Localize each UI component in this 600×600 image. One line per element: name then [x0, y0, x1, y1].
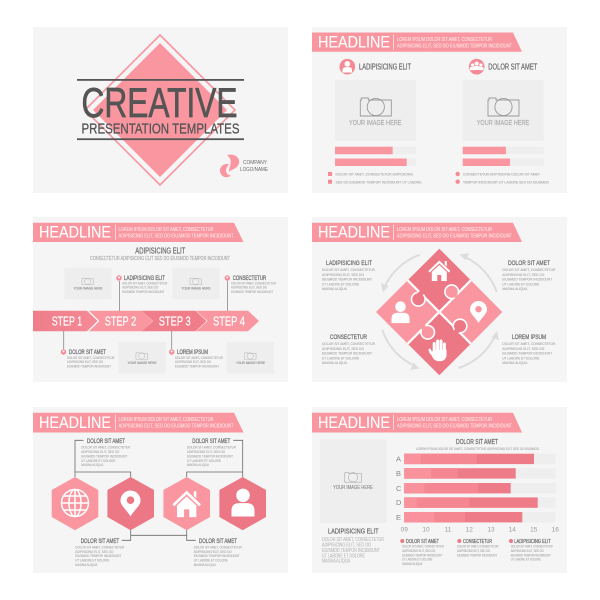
text block: dolor sit amet: UT LABORE ET DOLORE	[502, 281, 540, 286]
text block: lorem ipsum	[502, 334, 555, 365]
progress bars left	[335, 147, 416, 166]
text block: bottom left: DOLOR SIT AMET	[81, 539, 119, 545]
text block: ladipisicing	[322, 528, 384, 564]
text block: consectetur: MAGNA ALIQUA	[322, 360, 347, 365]
text block: consectetur: EIUSMOD TEMPOR INCIDIDUNT	[322, 351, 373, 356]
text block: top right: ADIPISICING ELIT, SED DO	[187, 449, 225, 454]
headline ribbon: ADIPISICING ELIT, SED DO EIUSMOD TEMPOR INCIDIDUNT	[397, 234, 513, 240]
title rule top	[77, 79, 244, 81]
legend: consectetur: CONSECTETUR	[463, 539, 492, 545]
text block: top right: UT LABORE ET DOLORE	[187, 458, 221, 463]
icon: house	[428, 260, 450, 281]
image placeholder 1: YOUR IMAGE HERE	[74, 286, 103, 290]
subtitle: PRESENTATION TEMPLATES	[82, 120, 240, 137]
text block: ladipisicing: ADIPISICING ELIT, SED DO	[322, 272, 364, 277]
logo text: LOGO/NAME	[240, 167, 268, 173]
panel: bar chart slide	[312, 407, 567, 573]
text block: bottom right: EIUSMOD TEMPOR INCIDIDUNT	[194, 553, 240, 558]
bar row A	[404, 454, 556, 464]
headline ribbon: HEADLINE	[318, 32, 390, 52]
logo text	[240, 160, 268, 173]
chart subtitle: LOREM IPSUM DOLOR SIT AMET, CONSECTETUR ADIPISICING ELIT SED DO EIUSMOD	[416, 446, 539, 451]
text block: lorem ipsum: DOLOR SIT AMET, CONSECTETUR	[502, 341, 555, 346]
text block: ladipisicing: UT LABORE ET DOLORE	[322, 281, 359, 286]
text block: lorem ipsum: UT LABORE ET DOLORE	[502, 355, 540, 360]
text block: top left: ADIPISICING ELIT, SED DO	[81, 449, 119, 454]
icon: pin	[120, 490, 141, 516]
legend: dolor sit amet: EIUSMOD TEMPOR INCIDIDUNT	[402, 552, 443, 557]
text block: consectetur: CONSECTETUR	[330, 334, 367, 341]
legend: dolor sit amet: UT LABORE ET DOLORE	[402, 557, 433, 562]
icon: hand	[430, 341, 446, 360]
legend: ladipisicing	[509, 539, 553, 562]
panel: steps timeline	[33, 217, 288, 382]
headline ribbon: LOREM IPSUM DOLOR SIT AMET, CONSECTETUR	[397, 417, 492, 423]
text block: bottom right: ADIPISICING ELIT, SED DO	[194, 549, 232, 554]
hexagon: globe	[52, 477, 98, 530]
callout: lorem ipsum: EIUSMOD TEMPOR INCIDIDUNT	[175, 364, 219, 368]
text block: lorem ipsum: MAGNA ALIQUA	[502, 360, 528, 365]
headline ribbon: LOREM IPSUM DOLOR SIT AMET, CONSECTETUR	[397, 37, 492, 43]
section title: ADIPISICING ELIT	[135, 246, 185, 256]
legend: ladipisicing: LADIPISICING ELIT	[514, 539, 551, 545]
panel: two image columns	[312, 27, 567, 193]
icon: person	[392, 301, 410, 323]
legend: dolor sit amet: ADIPISICING ELIT, SED DO	[402, 548, 435, 553]
text block: ladipisicing: LADIPISICING ELIT	[326, 260, 372, 267]
puzzle pieces	[376, 249, 502, 375]
text block: ladipisicing: DOLOR SIT AMET, CONSECTETUR	[322, 537, 384, 543]
axis labels: 13	[487, 526, 495, 533]
text block: lorem ipsum: ADIPISICING ELIT, SED DO	[502, 346, 544, 351]
axis labels: 09	[401, 526, 408, 533]
section subtitle: CONSECTETUR ADIPISICING ELIT SED DO EIUSMOD TEMPOR INCIDIDUNT	[90, 256, 230, 262]
bar row E	[404, 512, 556, 522]
headline ribbon	[312, 413, 522, 432]
legend: consectetur: DOLOR SIT AMET, CONSECTETUR	[457, 544, 499, 549]
text block: dolor sit amet: DOLOR SIT AMET	[508, 260, 550, 267]
arrow: top left	[381, 255, 420, 292]
callout: consectetur: CONSECTETUR	[233, 276, 267, 282]
text block: ladipisicing: MAGNA ALIQUA	[322, 558, 350, 564]
headline ribbon: HEADLINE	[39, 413, 111, 432]
legend right: TEMPOR INCIDIDUNT UT LABORE SED DO EIUSMOD	[463, 179, 549, 184]
category labels	[396, 454, 402, 522]
hexagon: person	[219, 477, 266, 530]
text block: dolor sit amet: EIUSMOD TEMPOR INCIDIDUNT	[502, 277, 553, 282]
callout: consectetur: ADIPISICING ELIT, SED DO	[231, 285, 267, 290]
callout: dolor sit amet: EIUSMOD TEMPOR INCIDIDUNT	[67, 364, 111, 368]
callout: dolor sit amet	[61, 331, 115, 368]
text block: bottom left	[75, 539, 124, 567]
callout: ladipisicing: EIUSMOD TEMPOR INCIDIDUNT	[122, 289, 165, 294]
legend left: DOLOR SIT AMET, CONSECTETUR ADIPISICING	[336, 172, 413, 176]
text block: top right	[187, 439, 236, 467]
image placeholder left	[335, 80, 416, 141]
image placeholder 1	[64, 268, 112, 299]
callout: ladipisicing: LADIPISICING ELIT	[124, 276, 165, 282]
hexagon: pin	[107, 477, 154, 530]
text block: top left: UT LABORE ET DOLORE	[81, 458, 116, 463]
callout: lorem ipsum: LOREM IPSUM	[177, 350, 208, 356]
text block: ladipisicing: UT LABORE ET DOLORE	[322, 553, 365, 559]
panel: puzzle diagram	[312, 217, 567, 382]
image placeholder 3: YOUR IMAGE HERE	[128, 360, 157, 365]
text block: ladipisicing: EIUSMOD TEMPOR INCIDIDUNT	[322, 548, 380, 554]
icon: person badge	[340, 59, 355, 74]
title rule bottom	[77, 138, 244, 140]
callout: ladipisicing	[116, 275, 167, 311]
text block: bottom right: MAGNA ALIQUA	[194, 562, 216, 567]
callout: ladipisicing: ADIPISICING ELIT, SED DO	[122, 285, 158, 290]
text block: bottom right: DOLOR SIT AMET, CONSECTETUR	[194, 544, 242, 549]
image placeholder right	[463, 80, 544, 141]
text block: ladipisicing: DOLOR SIT AMET, CONSECTETUR	[322, 267, 375, 272]
callout: lorem ipsum: ADIPISICING ELIT, SED DO	[175, 359, 211, 364]
arrow: top right	[460, 253, 497, 292]
headline ribbon: LOREM IPSUM DOLOR SIT AMET, CONSECTETUR	[397, 227, 492, 233]
icon: house	[172, 491, 201, 517]
text block: top left: EIUSMOD TEMPOR INCIDIDUNT	[81, 453, 128, 458]
text block: ladipisicing	[322, 260, 375, 291]
axis labels: 16	[552, 526, 559, 533]
column heading right: DOLOR SIT AMET	[488, 62, 537, 72]
headline ribbon	[312, 32, 522, 52]
legend: consectetur: ADIPISICING ELIT, SED DO	[457, 548, 490, 553]
image placeholder right: YOUR IMAGE HERE	[477, 118, 529, 127]
text block: bottom right: DOLOR SIT AMET	[199, 539, 237, 545]
category labels: C	[396, 484, 402, 493]
callout: consectetur: DOLOR SIT AMET, CONSECTETUR	[231, 280, 276, 286]
step 1 arrow: STEP 1	[52, 315, 82, 329]
legend: consectetur: EIUSMOD TEMPOR INCIDIDUNT	[457, 552, 497, 557]
headline ribbon: HEADLINE	[318, 223, 390, 242]
legend: ladipisicing: ADIPISICING ELIT, SED DO	[511, 548, 544, 553]
step 3 arrow	[142, 311, 206, 331]
text block: ladipisicing: EIUSMOD TEMPOR INCIDIDUNT	[322, 277, 373, 282]
icon: person	[232, 489, 254, 517]
arrow: bottom right	[458, 331, 499, 368]
image placeholder 4	[227, 342, 274, 374]
text block: top left: DOLOR SIT AMET	[87, 439, 125, 445]
diamond fill	[93, 43, 227, 177]
headline ribbon	[312, 223, 522, 242]
legend: dolor sit amet	[400, 539, 444, 566]
image placeholder 4: YOUR IMAGE HERE	[236, 360, 265, 365]
text block: top right: EIUSMOD TEMPOR INCIDIDUNT	[187, 453, 233, 458]
text block: top left: MAGNA ALIQUA	[81, 462, 104, 467]
image placeholder 2: YOUR IMAGE HERE	[182, 286, 211, 290]
connector lines	[75, 440, 243, 540]
diamond outline	[85, 35, 235, 185]
headline ribbon: HEADLINE	[318, 413, 390, 432]
text block: top right: MAGNA ALIQUA	[187, 462, 209, 467]
text block: bottom left: DOLOR SIT AMET, CONSECTETUR	[75, 544, 124, 549]
hexagon: house	[163, 477, 210, 530]
step 1 arrow	[33, 311, 98, 331]
text block: bottom right	[194, 539, 242, 567]
chart title: DOLOR SIT AMET	[456, 439, 499, 446]
image placeholder	[320, 439, 387, 523]
axis labels: 15	[530, 526, 538, 533]
logo text: COMPANY	[243, 160, 267, 166]
bar row D	[404, 497, 556, 508]
text block: consectetur: UT LABORE ET DOLORE	[322, 355, 359, 360]
axis labels: 14	[509, 526, 516, 533]
text block: ladipisicing: MAGNA ALIQUA	[322, 286, 347, 291]
image placeholder left: YOUR IMAGE HERE	[349, 118, 402, 127]
text block: consectetur: ADIPISICING ELIT, SED DO	[322, 346, 364, 351]
step 2 arrow	[89, 311, 152, 331]
legend: dolor sit amet: DOLOR SIT AMET, CONSECTETUR	[402, 544, 444, 549]
text block: top right: DOLOR SIT AMET	[192, 439, 231, 445]
legend: ladipisicing: DOLOR SIT AMET, CONSECTETUR	[511, 544, 553, 549]
callout: dolor sit amet: DOLOR SIT AMET, CONSECTETUR	[67, 355, 115, 360]
callout: dolor sit amet: ADIPISICING ELIT, SED DO	[67, 359, 103, 364]
text block: bottom left: MAGNA ALIQUA	[75, 562, 98, 567]
text block: consectetur: DOLOR SIT AMET, CONSECTETUR	[322, 341, 375, 346]
category labels: B	[396, 469, 401, 478]
step 3 arrow: STEP 3	[159, 315, 191, 329]
bar row C	[404, 483, 556, 493]
category labels: E	[396, 513, 401, 522]
image placeholder 2	[172, 268, 220, 299]
callout: consectetur	[225, 275, 276, 311]
legend: ladipisicing: UT LABORE ET DOLORE	[511, 557, 541, 562]
headline ribbon	[33, 223, 244, 242]
legend: ladipisicing: EIUSMOD TEMPOR INCIDIDUNT	[511, 552, 551, 557]
text block: consectetur	[322, 334, 375, 365]
image placeholder: YOUR IMAGE HERE	[333, 485, 373, 491]
text block: ladipisicing: LADIPISICING ELIT	[328, 528, 379, 535]
panel: hexagon diagram	[33, 407, 288, 573]
text block: dolor sit amet	[502, 260, 555, 291]
callout: lorem ipsum	[169, 331, 223, 368]
text block: top right: DOLOR SIT AMET, CONSECTETUR	[187, 444, 236, 450]
headline ribbon: ADIPISICING ELIT, SED DO EIUSMOD TEMPOR INCIDIDUNT	[397, 44, 513, 50]
legend left: SED DO EIUSMOD TEMPOR INCIDIDUNT UT LABORE	[336, 179, 422, 184]
axis labels: 10	[422, 526, 430, 533]
step 2 arrow: STEP 2	[105, 315, 136, 329]
text block: top left	[81, 439, 130, 467]
text block: top left: DOLOR SIT AMET, CONSECTETUR	[81, 444, 130, 450]
progress bars right	[463, 147, 544, 166]
headline ribbon: ADIPISICING ELIT, SED DO EIUSMOD TEMPOR INCIDIDUNT	[397, 424, 513, 430]
text block: bottom right: UT LABORE ET DOLORE	[194, 558, 228, 563]
headline ribbon: LOREM IPSUM DOLOR SIT AMET, CONSECTETUR	[118, 227, 214, 233]
callout: dolor sit amet: DOLOR SIT AMET	[69, 350, 106, 356]
title: creative: CREATIVE	[82, 79, 238, 126]
text block: ladipisicing: ADIPISICING ELIT, SED DO	[322, 542, 371, 548]
headline ribbon: HEADLINE	[39, 223, 111, 242]
panel: cover slide	[33, 27, 288, 193]
column heading left: LADIPISICING ELIT	[359, 62, 411, 72]
legend right: CONSECTETUR ADIPISICING DOLOR SIT AMET	[463, 172, 541, 176]
legend: dolor sit amet: MAGNA ALIQUA	[402, 561, 423, 566]
axis labels: 12	[466, 526, 473, 533]
bar row B	[404, 468, 556, 479]
headline ribbon: ADIPISICING ELIT, SED DO EIUSMOD TEMPOR INCIDIDUNT	[118, 234, 234, 240]
bar chart	[396, 454, 559, 533]
callout: ladipisicing: DOLOR SIT AMET, CONSECTETUR	[122, 280, 167, 286]
category labels: A	[396, 454, 401, 464]
text block: dolor sit amet: DOLOR SIT AMET, CONSECTETUR	[502, 267, 555, 272]
text block: lorem ipsum: EIUSMOD TEMPOR INCIDIDUNT	[502, 351, 553, 356]
text block: bottom left: ADIPISICING ELIT, SED DO	[75, 549, 113, 554]
legend left	[328, 172, 422, 184]
icon: pin	[470, 301, 487, 323]
text block: bottom left: EIUSMOD TEMPOR INCIDIDUNT	[75, 553, 122, 558]
text block: dolor sit amet: ADIPISICING ELIT, SED DO	[502, 272, 544, 277]
headline ribbon: LOREM IPSUM DOLOR SIT AMET, CONSECTETUR	[118, 417, 214, 423]
headline ribbon: ADIPISICING ELIT, SED DO EIUSMOD TEMPOR INCIDIDUNT	[118, 424, 234, 430]
legend: consectetur	[457, 539, 499, 557]
callout: lorem ipsum: DOLOR SIT AMET, CONSECTETUR	[175, 355, 223, 360]
callout: consectetur: EIUSMOD TEMPOR INCIDIDUNT	[231, 289, 273, 294]
arrow: bottom left	[382, 330, 420, 370]
axis labels	[401, 526, 559, 533]
axis labels: 11	[445, 526, 452, 533]
text block: dolor sit amet: MAGNA ALIQUA	[502, 286, 528, 291]
image placeholder 3	[118, 342, 166, 374]
category labels: D	[396, 498, 402, 507]
legend right	[456, 172, 549, 184]
legend: dolor sit amet: DOLOR SIT AMET	[406, 539, 439, 545]
text block: bottom left: UT LABORE ET DOLORE	[75, 558, 110, 563]
headline ribbon	[33, 413, 244, 432]
step 4 arrow	[196, 311, 259, 331]
text block: lorem ipsum: LOREM IPSUM	[512, 334, 546, 341]
step 4 arrow: STEP 4	[213, 315, 245, 329]
icon: globe	[62, 490, 88, 516]
icon: group badge	[469, 59, 485, 74]
icon: company logo	[220, 155, 239, 177]
